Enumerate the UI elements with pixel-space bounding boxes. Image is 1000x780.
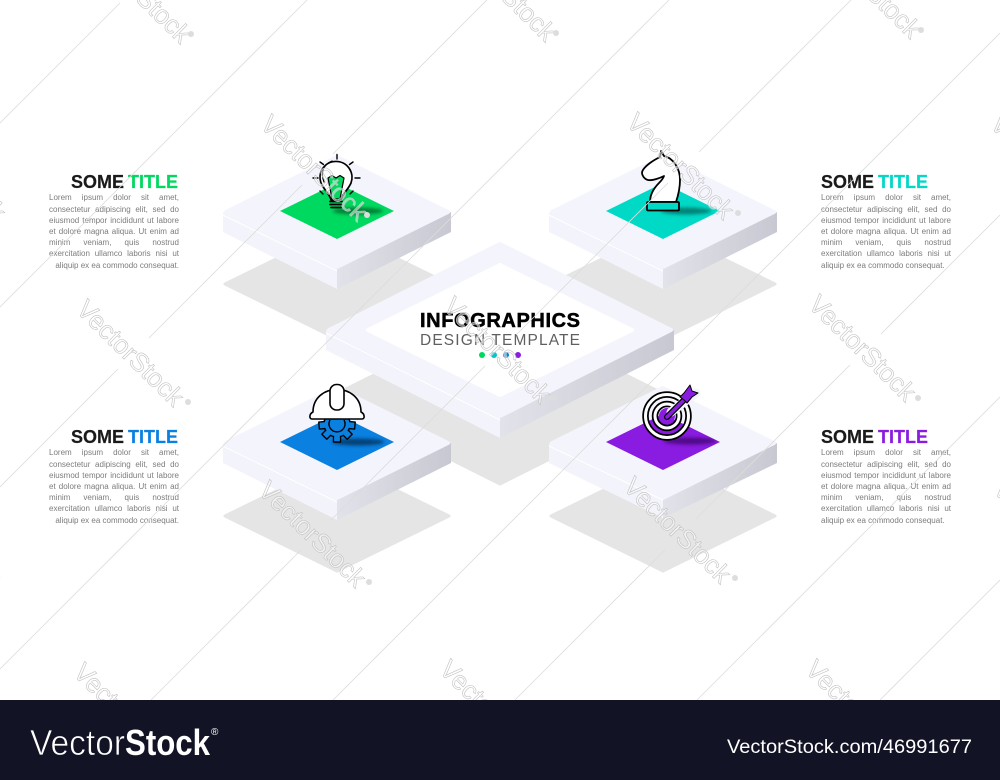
text: aliquip ex ea commodo consequat. <box>55 516 179 525</box>
floor shadows <box>225 229 775 571</box>
panel: bottom-left platform <box>223 388 451 520</box>
text block: top-left: exercitation ullamco laboris nisi ut <box>49 249 179 258</box>
text block: bottom-right: exercitation ullamco laboris nisi ut <box>821 504 951 513</box>
watermarks: VectorStock <box>255 109 375 228</box>
watermarks: VectorStock <box>434 654 554 773</box>
panel: centre platform <box>326 244 674 438</box>
logo <box>30 722 219 763</box>
text: aliquip ex ea commodo consequat. <box>821 516 945 525</box>
text block: bottom-right: eiusmod tempor incididunt ut labore <box>821 471 951 480</box>
text block: bottom-left <box>49 427 179 525</box>
text block: bottom-left: eiusmod tempor incididunt ut labore <box>49 471 179 480</box>
watermarks: VectorStock <box>68 657 188 776</box>
text block: bottom-right <box>821 427 951 525</box>
panel: bottom-right platform <box>549 388 777 518</box>
text block: bottom-left: et dolore magna aliqua. Ut enim ad <box>49 482 179 491</box>
text: aliquip ex ea commodo consequat. <box>821 261 945 270</box>
text block: top-left: consectetur adipiscing elit, sed do <box>49 205 179 214</box>
blue square <box>280 420 394 470</box>
text block: bottom-right: consectetur adipiscing elit, sed do <box>821 460 951 469</box>
centre heading: DESIGN TEMPLATE <box>420 332 580 349</box>
text block: bottom-right: Lorem ipsum dolor sit amet, <box>821 448 951 457</box>
logo: ® <box>211 727 219 738</box>
text block: top-left: minim veniam, quis nostrud <box>49 238 179 247</box>
watermarks: VectorStock <box>71 294 191 413</box>
teal square <box>606 183 720 239</box>
image id: VectorStock.com/46991677 <box>727 736 972 758</box>
text block: bottom-left: minim veniam, quis nostrud <box>49 493 179 502</box>
icon: chess knight <box>642 151 680 210</box>
text block: bottom-left: SOME TITLE <box>71 427 178 447</box>
text block: top-right: et dolore magna aliqua. Ut enim ad <box>821 227 951 236</box>
text block: bottom-left: consectetur adipiscing elit, sed do <box>49 460 179 469</box>
watermarks: VectorStock <box>621 107 741 226</box>
footer bar <box>0 700 1000 780</box>
centre heading: INFOGRAPHICS <box>420 310 580 332</box>
text block: bottom-left: exercitation ullamco laboris nisi ut <box>49 504 179 513</box>
text block: top-left: eiusmod tempor incididunt ut labore <box>49 216 179 225</box>
text block: top-right: Lorem ipsum dolor sit amet, <box>821 193 951 202</box>
colour dots <box>479 352 521 358</box>
centre heading <box>420 310 580 349</box>
green square <box>280 183 394 239</box>
watermarks: VectorStock <box>800 654 920 773</box>
text block: top-right: minim veniam, quis nostrud <box>821 238 951 247</box>
text block: top-left: et dolore magna aliqua. Ut enim ad <box>49 227 179 236</box>
text block: top-right: SOME TITLE <box>821 172 928 192</box>
text block: bottom-right: et dolore magna aliqua. Ut enim ad <box>821 482 951 491</box>
text block: bottom-left: Lorem ipsum dolor sit amet, <box>49 448 179 457</box>
text block: top-right <box>821 172 951 270</box>
text block: top-right: eiusmod tempor incididunt ut labore <box>821 216 951 225</box>
text block: top-left: Lorem ipsum dolor sit amet, <box>49 193 179 202</box>
text: aliquip ex ea commodo consequat. <box>55 261 179 270</box>
purple square <box>606 414 720 470</box>
text block: top-right: consectetur adipiscing elit, sed do <box>821 205 951 214</box>
text block: top-left <box>49 172 179 270</box>
icon: target and arrow <box>646 385 698 438</box>
watermarks: VectorStock <box>438 291 558 410</box>
logo: Stock <box>125 722 211 763</box>
text block: top-left: SOME TITLE <box>71 172 178 192</box>
watermarks: VectorStock <box>803 289 923 408</box>
watermarks: VectorStock <box>618 471 738 590</box>
logo: Vector <box>30 722 125 763</box>
icon: light bulb <box>313 154 360 208</box>
text block: bottom-right: minim veniam, quis nostrud <box>821 493 951 502</box>
panel: top-left platform <box>223 157 451 289</box>
text block: bottom-right: SOME TITLE <box>821 427 928 447</box>
icon: helmet and gear <box>310 384 364 442</box>
panel: top-right platform <box>549 157 777 289</box>
watermarks: VectorStock <box>253 475 373 594</box>
text block: top-right: exercitation ullamco laboris nisi ut <box>821 249 951 258</box>
